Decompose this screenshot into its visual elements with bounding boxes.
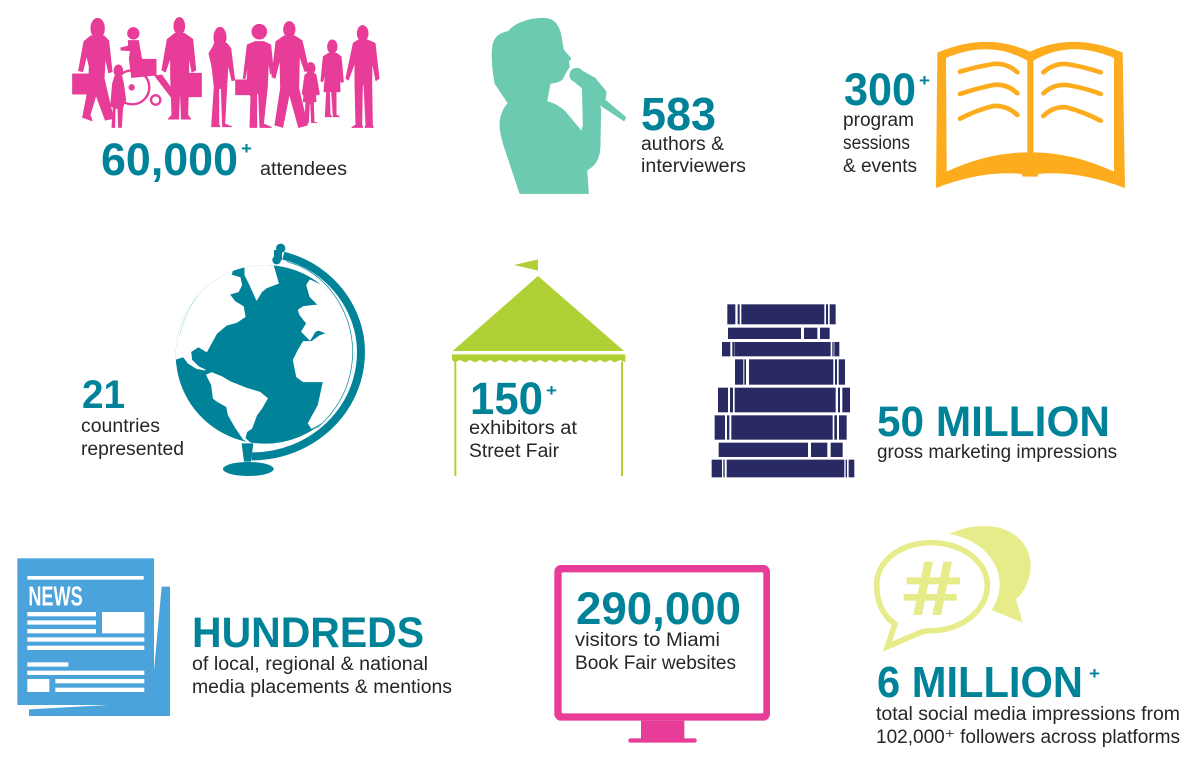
label: visitors to websites bbox=[575, 630, 736, 674]
label: authors and interviewers: interviewers bbox=[641, 156, 746, 177]
label: media placements and mentions: of local, regional & national bbox=[192, 654, 428, 675]
label: media placements and mentions bbox=[192, 654, 452, 698]
label: authors and interviewers: authors & bbox=[641, 134, 724, 155]
icon: speaker with microphone bbox=[492, 18, 626, 193]
panel: countries bbox=[81, 244, 370, 476]
stat: 60,000+: 60,000 bbox=[101, 134, 238, 185]
stat: 6 MILLION+: + bbox=[1089, 664, 1100, 683]
icon: newspaper: NEWS bbox=[28, 581, 83, 612]
icon: open book bbox=[936, 42, 1125, 188]
stat: 583: 583 bbox=[641, 88, 716, 140]
icon: computer monitor bbox=[554, 565, 770, 743]
label: exhibitors at Street Fair: Street Fair bbox=[469, 441, 560, 462]
label: gross marketing impressions: gross marketing impressions bbox=[877, 442, 1117, 463]
label: countries represented bbox=[81, 416, 184, 460]
panel: attendees bbox=[73, 18, 379, 185]
label: authors and interviewers bbox=[641, 134, 746, 177]
label: media placements and mentions: media placements & mentions bbox=[192, 677, 452, 698]
stat: 21: 21 bbox=[82, 373, 125, 417]
icon: newspaper bbox=[17, 558, 170, 716]
stat: 150+: + bbox=[546, 381, 557, 400]
label: program sessions and events: sessions bbox=[843, 133, 910, 154]
label: social media impressions and followers: total social media impressions from bbox=[876, 704, 1180, 725]
label: program sessions and events: & events bbox=[843, 156, 917, 177]
label: exhibitors at Street Fair: exhibitors at bbox=[469, 418, 578, 439]
stat: 50 MILLION: 50 MILLION bbox=[877, 398, 1110, 446]
label: visitors to websites: visitors to Miami bbox=[575, 630, 720, 651]
panel: exhibitors bbox=[452, 259, 625, 476]
label: program sessions and events bbox=[843, 110, 917, 177]
stat: HUNDREDS: HUNDREDS bbox=[192, 609, 424, 657]
icon: globe bbox=[163, 244, 370, 476]
stat: 300+: 300 bbox=[844, 64, 916, 115]
label: visitors to websites: Book Fair websites bbox=[575, 653, 736, 674]
panel: social media bbox=[876, 526, 1180, 748]
stat: 300+: + bbox=[919, 71, 930, 90]
stat: 6 MILLION+: 6 MILLION bbox=[877, 658, 1083, 707]
icon: hashtag speech bubbles bbox=[877, 526, 1031, 647]
label: exhibitors at Street Fair bbox=[469, 418, 578, 462]
label: social media impressions and followers: 102,000⁺ followers across platforms bbox=[876, 727, 1180, 748]
label: program sessions and events: program bbox=[843, 110, 914, 131]
label: countries represented: countries bbox=[81, 416, 160, 437]
panel: media placements bbox=[17, 558, 452, 716]
label: countries represented: represented bbox=[81, 439, 184, 460]
label: attendees: attendees bbox=[260, 159, 347, 180]
panel: authors bbox=[492, 18, 746, 193]
icon: tent bbox=[452, 259, 625, 476]
stat: 290,000: 290,000 bbox=[576, 583, 741, 634]
panel: program sessions bbox=[843, 42, 1125, 188]
icon: group of people bbox=[73, 18, 379, 127]
stat: 60,000+: + bbox=[241, 139, 252, 158]
panel: marketing impressions bbox=[712, 304, 1117, 477]
icon: stack of books bbox=[712, 304, 854, 477]
stat: 150+: 150 bbox=[470, 373, 543, 424]
label: social media impressions and followers bbox=[876, 704, 1180, 748]
panel: website visitors bbox=[554, 565, 770, 743]
